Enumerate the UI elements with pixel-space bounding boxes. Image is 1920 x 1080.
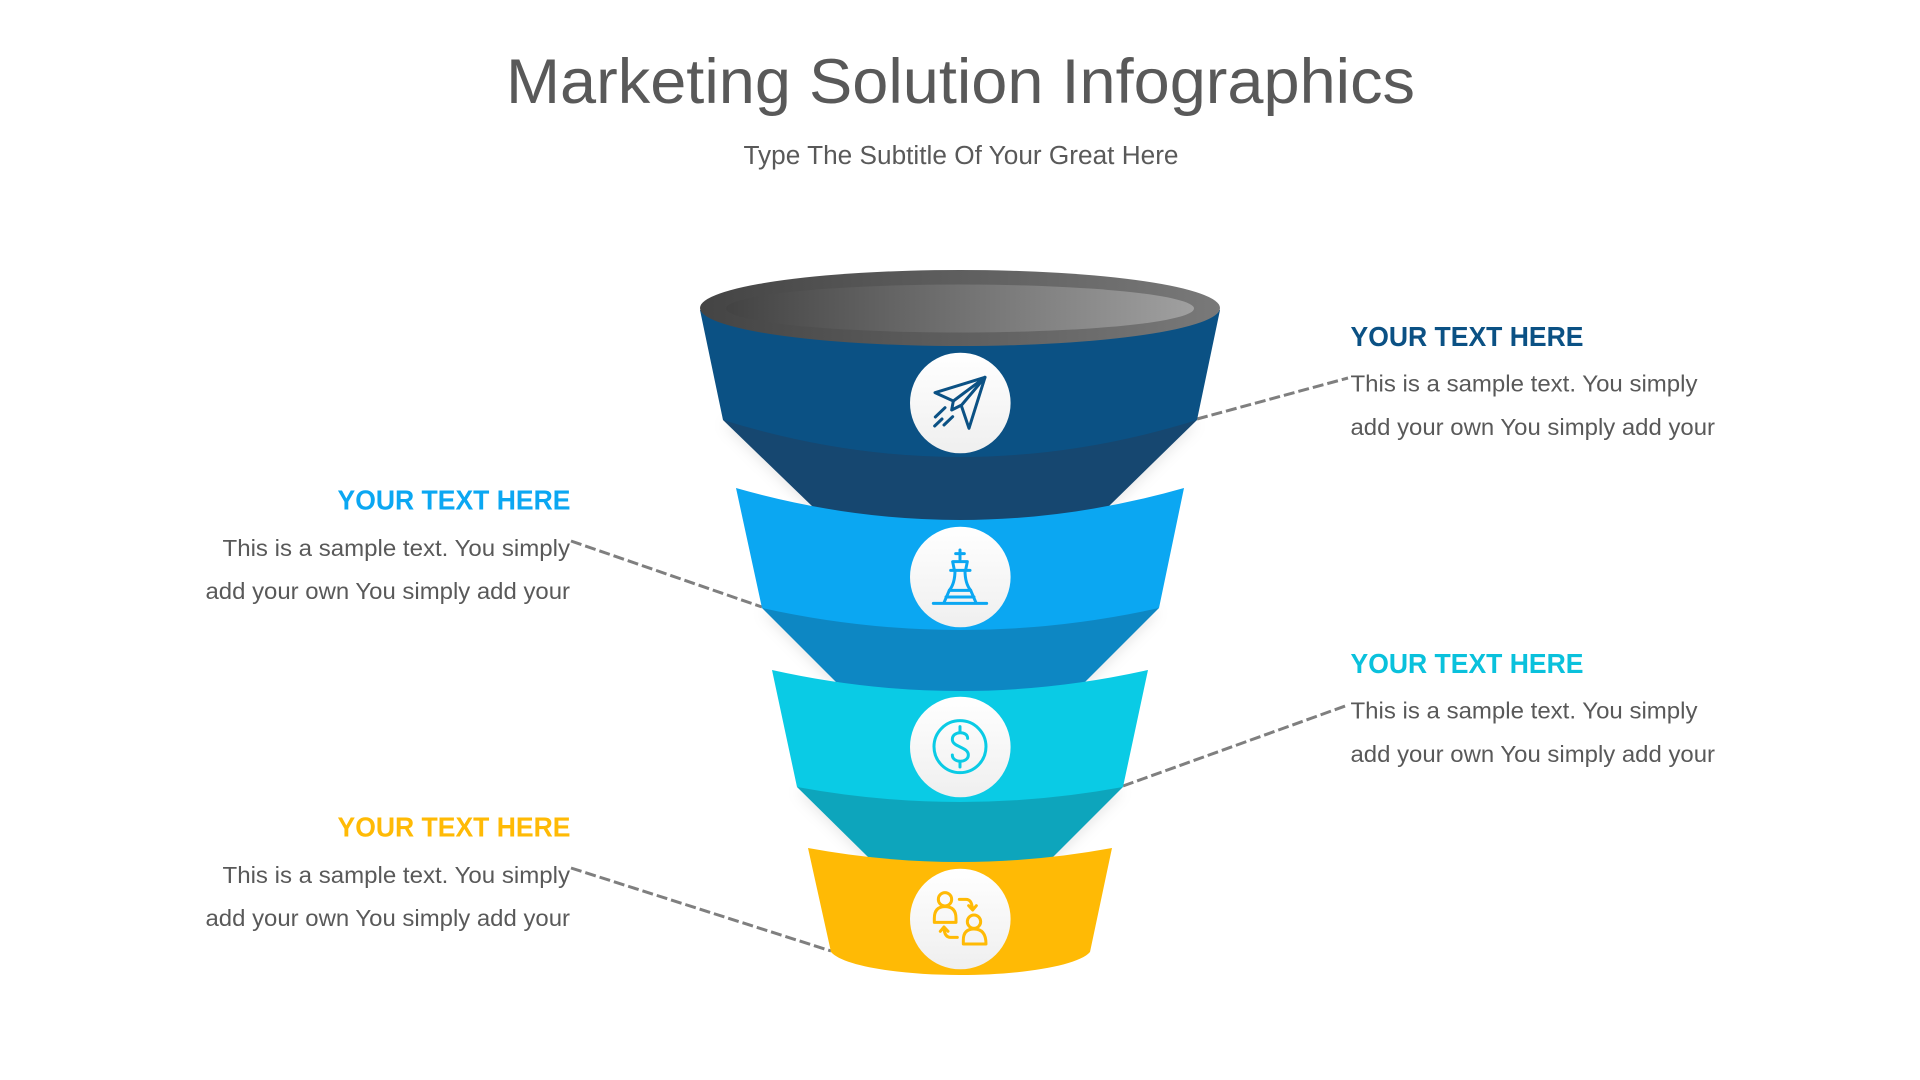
icon disc: paper plane xyxy=(910,353,1011,453)
icon disc: dollar coin xyxy=(910,697,1011,797)
funnel tier 1: dark blue xyxy=(700,310,1220,532)
leader line: step 1 xyxy=(1197,378,1348,419)
funnel xyxy=(700,270,1220,975)
leader line: step 4 xyxy=(571,868,831,951)
text block: step 1: add your own You simply add your xyxy=(1350,414,1715,440)
funnel tier 4: yellow xyxy=(808,848,1112,975)
text block: step 3: add your own You simply add your xyxy=(1350,741,1715,767)
funnel tier 2: sky blue xyxy=(736,488,1184,705)
text block: step 3 xyxy=(1350,648,1715,767)
text block: step 2 xyxy=(206,484,570,604)
text block: step 4: YOUR TEXT HERE xyxy=(338,812,570,842)
text block: step 2: YOUR TEXT HERE xyxy=(338,484,570,516)
leader line: step 2 xyxy=(571,541,762,607)
text block: step 1 xyxy=(1350,321,1715,440)
text block: step 3: YOUR TEXT HERE xyxy=(1350,648,1584,679)
text block: step 1: This is a sample text. You simply xyxy=(1350,370,1698,396)
text block: step 2: This is a sample text. You simply xyxy=(222,535,570,561)
text block: step 3: This is a sample text. You simply xyxy=(1350,698,1698,724)
text block: step 4: add your own You simply add your xyxy=(206,905,570,931)
funnel rim: grey ellipse xyxy=(700,270,1220,346)
leader line: step 3 xyxy=(1123,705,1348,786)
funnel tier 3: cyan xyxy=(772,670,1148,870)
icon disc: people exchange xyxy=(910,869,1011,969)
subtitle: Type The Subtitle Of Your Great Here xyxy=(744,142,1178,170)
text block: step 4 xyxy=(206,812,570,931)
text block: step 2: add your own You simply add your xyxy=(206,578,570,604)
text block: step 1: YOUR TEXT HERE xyxy=(1350,321,1584,352)
title: Marketing Solution Infographics xyxy=(506,47,1415,117)
icon disc: chess king xyxy=(910,527,1011,627)
text block: step 4: This is a sample text. You simply xyxy=(222,862,570,888)
